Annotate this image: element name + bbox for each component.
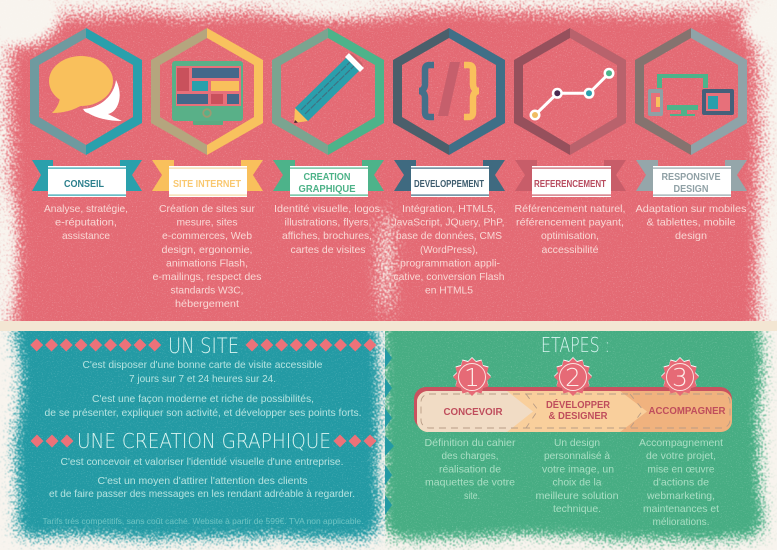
process bar bbox=[414, 387, 732, 432]
text: conseil description: Analyse, stratégie, bbox=[44, 204, 128, 215]
step label: developper et designer bbox=[546, 398, 611, 422]
diamonds: un site right bbox=[246, 338, 376, 352]
text: step 2 description: choix de la bbox=[552, 478, 602, 489]
badge: step 3: 3 bbox=[672, 363, 688, 392]
ribbon: creation graphique: GRAPHIQUE bbox=[298, 184, 356, 195]
text: creation graphique description bbox=[274, 204, 380, 256]
text: referencement description: optimisation, bbox=[541, 231, 599, 242]
service: developpement bbox=[392, 28, 505, 297]
ribbon: conseil: CONSEIL bbox=[64, 179, 104, 190]
badge: step 2 bbox=[554, 357, 592, 396]
text: site internet description: mesure, sites bbox=[176, 218, 238, 229]
text: conseil description: assistance bbox=[62, 231, 110, 242]
text: responsive design description: & tablettes, mobile bbox=[646, 218, 736, 229]
text: developpement description: (WordPress), bbox=[420, 245, 478, 256]
text: step 1 description: maquettes de votre bbox=[425, 478, 515, 489]
text: creation paragraphs: C'est concevoir et valoriser l'identidé visuelle d'une entreprise. bbox=[60, 457, 344, 468]
zigzag: teal teeth on panel boundary bbox=[385, 348, 394, 515]
text: step 2 description: technique. bbox=[553, 504, 601, 515]
text: step 2 description: votre image, un bbox=[542, 464, 614, 475]
ribbon: developpement bbox=[394, 160, 505, 197]
hexagon: referencement bbox=[514, 28, 626, 155]
hexagon: developpement bbox=[393, 28, 505, 155]
diamonds: creation right bbox=[334, 434, 376, 448]
ribbon: creation graphique: CREATION bbox=[304, 172, 350, 183]
text: developpement description bbox=[392, 204, 504, 297]
diamonds: un site left bbox=[30, 338, 161, 352]
service: conseil bbox=[30, 28, 142, 242]
ribbon: developpement: DEVELOPPEMENT bbox=[414, 179, 484, 190]
badge: step 1: 1 bbox=[464, 363, 480, 392]
text: referencement description: Référencement naturel, bbox=[514, 204, 626, 215]
text: un site paragraphs bbox=[44, 360, 362, 419]
step label: developper et designer: DÉVELOPPER bbox=[546, 398, 611, 411]
hexagon: creation graphique bbox=[272, 28, 384, 155]
ribbon: site internet: SITE INTERNET bbox=[173, 179, 241, 190]
text: step 1 description: site. bbox=[464, 491, 480, 502]
text: responsive design description bbox=[636, 204, 746, 242]
text: responsive design description: Adaptation sur mobiles bbox=[636, 204, 746, 215]
text: site internet description: design, ergonomie, bbox=[162, 245, 252, 256]
text: responsive design description: design bbox=[675, 231, 707, 242]
step label: accompagner: ACCOMPAGNER bbox=[648, 406, 726, 417]
icon: monitor bbox=[172, 61, 243, 125]
text: step 3 description: maintenances et bbox=[643, 504, 719, 515]
ribbon: responsive design bbox=[636, 160, 747, 197]
text: creation paragraphs bbox=[49, 457, 355, 500]
icon: growth line chart bbox=[530, 68, 614, 120]
text: conseil description: e-réputation, bbox=[55, 218, 117, 229]
text: site internet description: hébergement bbox=[175, 299, 239, 310]
text: site internet description: e-mailings, respect des bbox=[152, 272, 262, 283]
text: site internet description: Création de sites sur bbox=[159, 204, 256, 215]
badge: step 3 bbox=[661, 357, 699, 396]
text: conseil description bbox=[44, 204, 128, 242]
text: step 2 description bbox=[536, 438, 618, 515]
text: step 1 description: des charges, bbox=[442, 451, 498, 462]
text: un site paragraphs: C'est une façon moderne et riche de possibilités, bbox=[92, 394, 314, 405]
text: site internet description: e-commerces, Web bbox=[162, 231, 252, 242]
text: creation graphique description: Identité visuelle, logos bbox=[274, 204, 380, 215]
ribbon: creation graphique bbox=[273, 160, 384, 197]
heading: un site: UN SITE bbox=[168, 334, 239, 358]
text: developpement description: cative, conversion Flash bbox=[394, 272, 504, 283]
text: step 1 description: réalisation de bbox=[439, 464, 501, 475]
heading: etapes: ETAPES : bbox=[541, 333, 610, 357]
text: site internet description bbox=[152, 204, 262, 310]
ribbon: site internet bbox=[152, 160, 263, 197]
service: responsive design bbox=[635, 28, 747, 242]
text: un site paragraphs: 7 jours sur 7 et 24 heures sur 24. bbox=[129, 374, 276, 385]
text: referencement description: référencement payant, bbox=[516, 218, 624, 229]
text: creation paragraphs: C'est un moyen d'attirer l'attention des clients bbox=[98, 476, 308, 487]
text: site internet description: animations Flash, bbox=[166, 258, 248, 269]
text: step 3 description: webmarketing, bbox=[646, 491, 715, 502]
text: developpement description: Intégration, HTML5, bbox=[402, 204, 496, 215]
ribbon: responsive design: RESPONSIVE bbox=[662, 172, 721, 183]
text: step 2 description: meilleure solution bbox=[536, 491, 618, 502]
divider: cream strip bbox=[0, 321, 777, 331]
step label: developper et designer: & DESIGNER bbox=[548, 411, 608, 422]
hexagon: site internet bbox=[151, 28, 263, 155]
icon: code braces bbox=[419, 62, 479, 117]
panel: green background bbox=[385, 315, 777, 550]
panel: teal background bbox=[0, 315, 385, 550]
hexagon: conseil bbox=[30, 28, 142, 155]
text: un site paragraphs: C'est disposer d'une bonne carte de visite accessible bbox=[82, 360, 323, 371]
service: site internet bbox=[151, 28, 263, 310]
section: une creation graphique bbox=[30, 429, 376, 526]
text: step 3 description: d'actions de bbox=[653, 478, 709, 489]
icon: pencil bbox=[294, 53, 364, 123]
text: creation graphique description: cartes de visites bbox=[290, 245, 366, 256]
hexagon: responsive design bbox=[635, 28, 747, 155]
text: pricing note: Tarifs très compétitifs, sans coût caché. Website à partir de 599€. TVA non applicable. bbox=[42, 516, 364, 526]
ribbon: referencement bbox=[515, 160, 626, 197]
text: referencement description bbox=[514, 204, 626, 256]
section: etapes bbox=[414, 333, 732, 528]
step label: concevoir: CONCEVOIR bbox=[444, 407, 503, 418]
ribbon: responsive design: DESIGN bbox=[674, 184, 708, 195]
text: step 3 description: Accompagnement bbox=[639, 438, 723, 449]
text: site internet description: standards W3C, bbox=[170, 286, 244, 297]
service: creation graphique bbox=[272, 28, 384, 256]
text: developpement description: base de données, CMS bbox=[396, 231, 502, 242]
text: referencement description: accessibilité bbox=[542, 245, 599, 256]
icon: responsive devices bbox=[648, 74, 734, 116]
service: referencement bbox=[514, 28, 626, 256]
text: un site paragraphs: de se présenter, expliquer son activité, et développer ses points forts. bbox=[44, 408, 362, 419]
text: step 1 description bbox=[424, 438, 516, 502]
text: step 3 description: méliorations. bbox=[652, 517, 710, 528]
ribbon: referencement: REFERENCEMENT bbox=[534, 179, 606, 190]
badge: step 1 bbox=[453, 357, 491, 396]
ribbon: conseil bbox=[32, 160, 142, 197]
diamonds: creation left bbox=[30, 434, 74, 448]
text: step 2 description: Un design bbox=[554, 438, 600, 449]
text: step 3 description: mise en œuvre bbox=[648, 464, 715, 475]
panel: pink services background bbox=[0, 0, 777, 321]
text: step 3 description bbox=[639, 438, 723, 528]
icon: speech bubbles bbox=[49, 56, 122, 121]
text: developpement description: JavaScript, JQuery, PhP, bbox=[392, 218, 504, 229]
text: developpement description: programmation appli- bbox=[400, 258, 500, 269]
text: step 2 description: personnalisé à bbox=[544, 451, 610, 462]
text: creation graphique description: illustrations, flyers, bbox=[284, 218, 372, 229]
text: step 1 description: Définition du cahier bbox=[424, 438, 516, 449]
badge: step 2: 2 bbox=[565, 363, 581, 392]
text: step 3 description: de votre projet, bbox=[646, 451, 716, 462]
text: developpement description: en HTML5 bbox=[425, 286, 473, 297]
text: creation graphique description: affiches, brochures, bbox=[282, 231, 372, 242]
heading: une creation graphique: UNE CREATION GRAPHIQUE bbox=[77, 429, 331, 453]
section: un site bbox=[30, 334, 376, 419]
text: creation paragraphs: et de faire passer des messages en les rendant adréable à regarder. bbox=[49, 489, 355, 500]
